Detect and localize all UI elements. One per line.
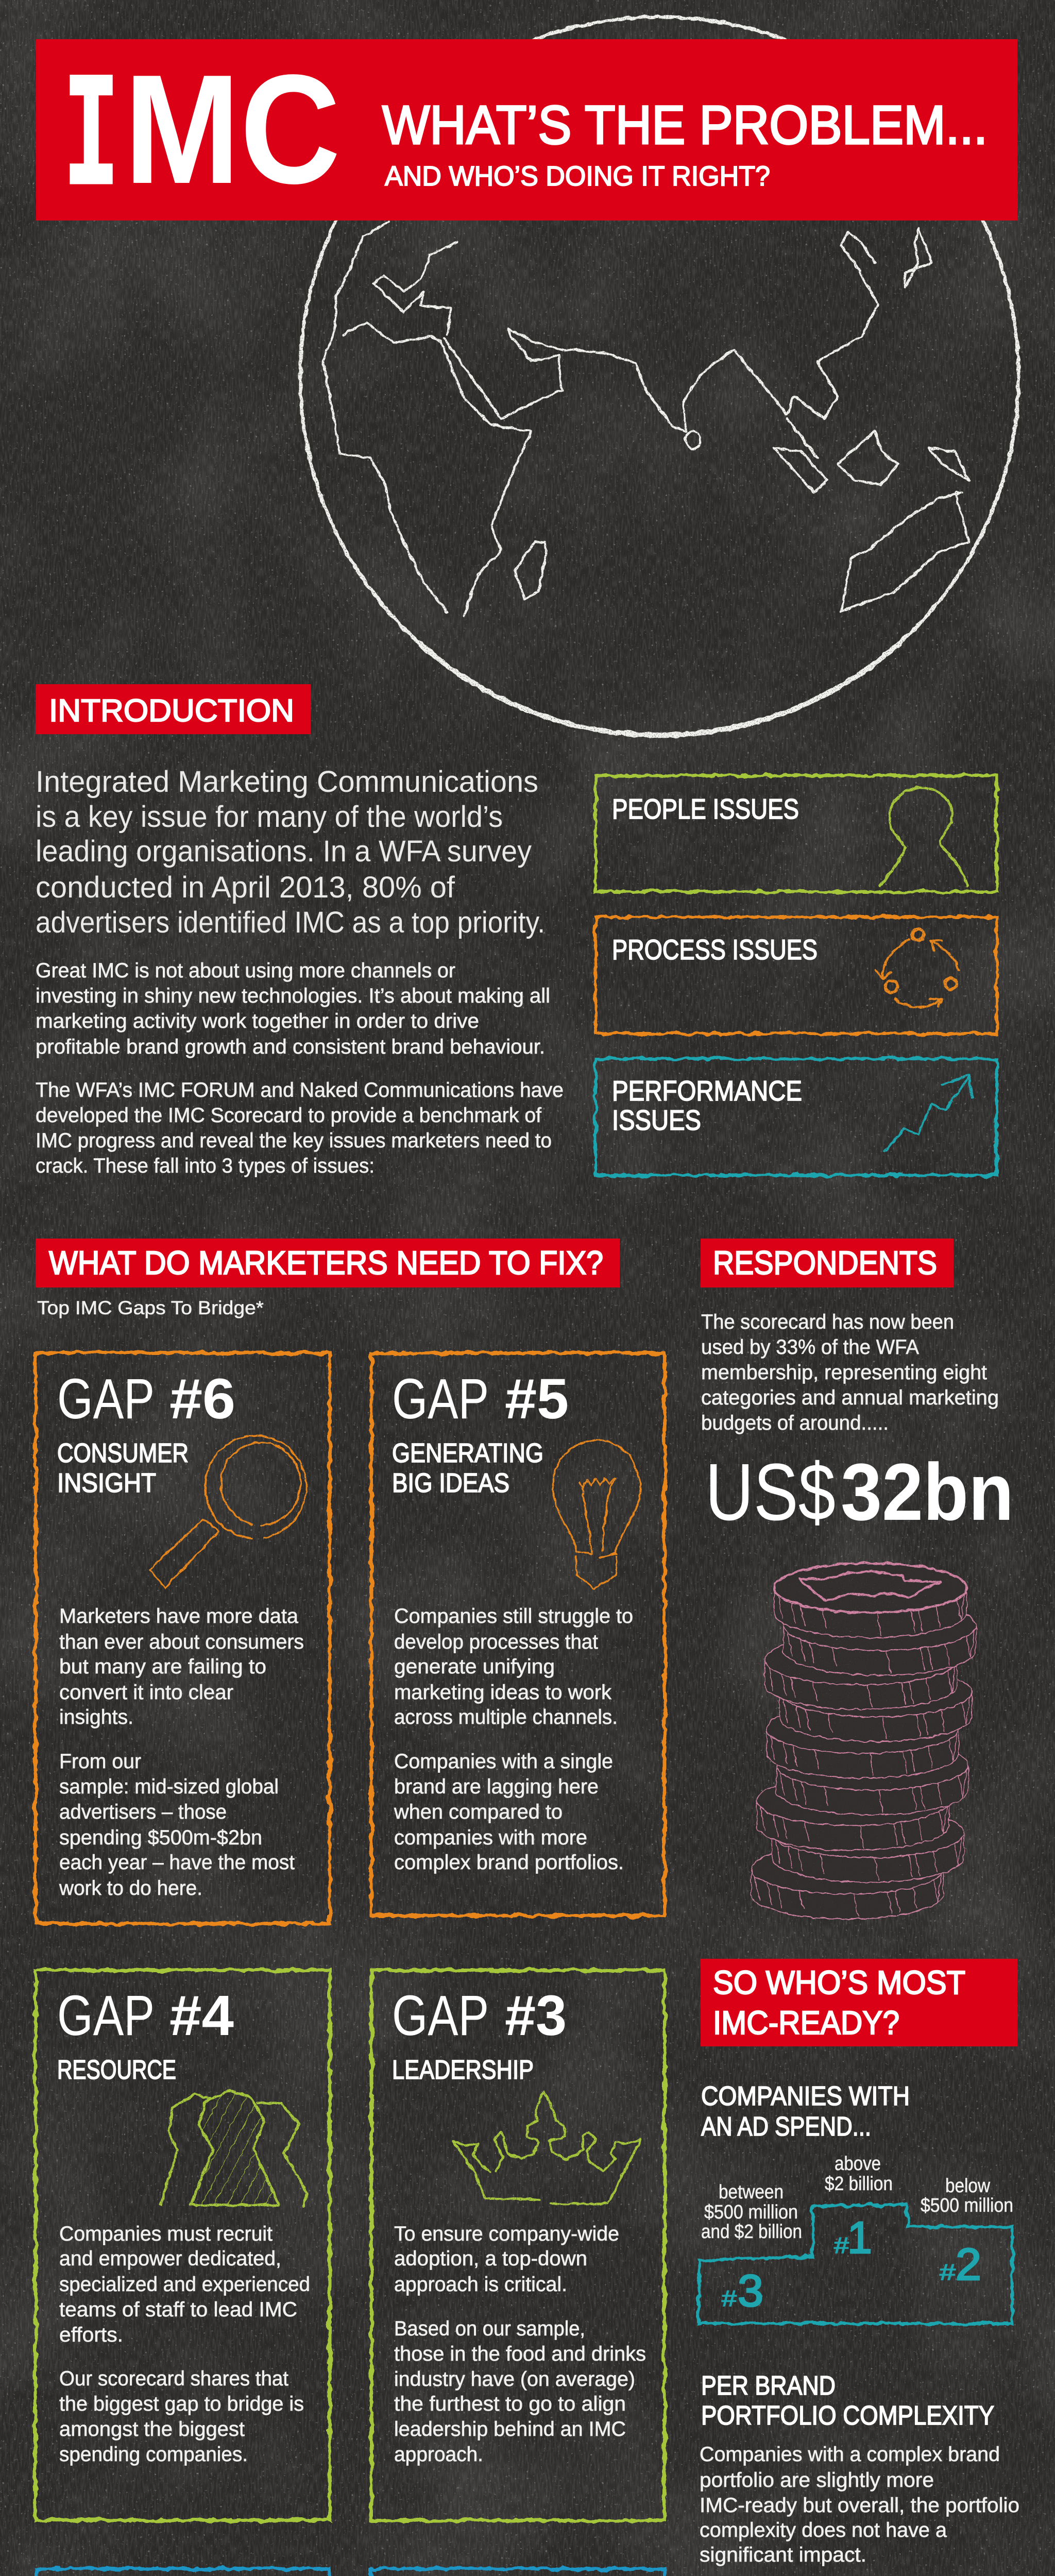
body text: than ever about consumers [59,1631,304,1653]
body text: approach. [394,2443,483,2466]
body text: spending $500m-$2bn [59,1826,262,1849]
text: IMC forum: developed the IMC Scorecard to provide a benchmark of [36,1104,542,1127]
gap title: INSIGHT [57,1468,156,1498]
body text: adoption, a top-down [394,2247,587,2270]
body text: advertisers – those [59,1801,227,1823]
card: gap 2 [36,2569,330,2576]
gap number: #6 [169,1367,235,1431]
stat: US$32bn: 32bn [841,1447,1014,1537]
rank 1: # [834,2233,849,2258]
panel: who's most IMC-ready [699,1959,1029,2576]
rank 1 [834,2213,872,2263]
text: great IMC: marketing activity work together in order to drive [36,1010,479,1032]
gap number [392,1984,567,2047]
body text: and empower dedicated, [59,2247,281,2270]
label: below 500 million: below [945,2175,990,2197]
body text: Companies still struggle to [394,1605,633,1628]
body text: work to do here. [59,1877,202,1900]
icon: light bulb [553,1440,640,1588]
text: scorecard usage: The scorecard has now been [701,1311,954,1333]
body text: brand are lagging here [394,1775,599,1798]
panel: respondents [701,1239,1014,1919]
gap number [57,1367,235,1431]
text: scorecard usage: membership, representing eight [701,1361,987,1384]
body text: From our [59,1750,141,1773]
body text [59,1605,304,1900]
text: lead paragraph: advertisers identified IMC as a top priority. [36,906,545,939]
title: IMC: I [63,48,119,232]
text: lead paragraph: is a key issue for many of the world’s [36,800,503,834]
text: great IMC: Great IMC is not about using more channels or [36,959,455,982]
label: performance issues: ISSUES [612,1104,701,1136]
body text: sample: mid-sized global [59,1775,279,1798]
gap number: GAP [392,1984,489,2047]
heading: so who's most IMC-ready [701,1959,1017,2046]
body text: industry have (on average) [394,2368,635,2391]
panel: process issues [595,917,997,1033]
label: performance issues: PERFORMANCE [612,1075,802,1107]
gap number [392,1367,569,1431]
heading: so who's most IMC-ready: SO WHO’S MOST [713,1964,965,2001]
text: lead paragraph: Integrated Marketing Communications [36,765,538,799]
panel: what do marketers need to fix [36,1239,665,2576]
label: performance issues [612,1075,802,1136]
label: above 2 billion: above [835,2153,881,2175]
body text: insights. [59,1706,133,1728]
text: great IMC: investing in shiny new technologies. It’s about making all [36,985,550,1007]
rank 2: # [940,2260,956,2285]
card: gap 4 [36,1970,330,2520]
text: portfolio complexity: IMC-ready but overall, the portfolio [700,2494,1019,2517]
gap number: #4 [169,1984,234,2047]
text: portfolio complexity: portfolio are slightly more [700,2469,934,2492]
text: IMC forum: IMC progress and reveal the key issues marketers need to [36,1129,552,1152]
text: great IMC: profitable brand growth and consistent brand behaviour. [36,1036,545,1058]
icon: rising chart arrow [884,1075,972,1151]
text: portfolio complexity: Companies with a complex brand [700,2443,1000,2466]
card: gap 3 [371,1970,665,2520]
gap title: CONSUMER [57,1438,189,1468]
label: below 500 million [921,2175,1013,2216]
icon: person [880,788,967,886]
body text [59,2223,310,2466]
body text: companies with more [394,1826,587,1849]
body text: complex brand portfolios. [394,1851,624,1874]
card: gap 5 [371,1353,665,1916]
gap title: RESOURCE [57,2055,176,2085]
text: scorecard usage [701,1311,999,1434]
panel: people issues [595,775,997,892]
text: IMC forum: The WFA’s IMC FORUM and Naked Communications have [36,1079,564,1101]
gap title: GENERATING [392,1438,543,1468]
body text: leadership behind an IMC [394,2418,626,2441]
subheading: ad spend [701,2081,910,2142]
body text: efforts. [59,2324,123,2346]
title banner [36,39,1017,232]
label: above 2 billion: $2 billion [825,2173,893,2195]
panel: performance issues [595,1059,997,1175]
gap number: #5 [505,1367,569,1431]
body text: amongst the biggest [59,2418,245,2441]
body text: teams of staff to lead IMC [59,2298,297,2321]
icon: crown [453,2092,641,2204]
body text: convert it into clear [59,1681,233,1704]
stat: US$32bn [705,1447,1014,1537]
subheading: per brand portfolio complexity: PORTFOLIO COMPLEXITY [701,2401,994,2431]
label: below 500 million: $500 million [921,2195,1013,2216]
text: portfolio complexity: complexity does not have a [700,2519,947,2541]
subheading: ad spend: COMPANIES WITH [701,2081,910,2111]
rank 2: 2 [956,2240,981,2290]
gap title [392,1438,543,1498]
gap number [57,1984,234,2047]
body text: the furthest to go to align [394,2393,626,2415]
text: lead paragraph: leading organisations. In a WFA survey [36,835,532,868]
icon: magnifying glass [149,1435,306,1588]
body text: marketing ideas to work [394,1681,612,1704]
heading: what do marketers need to fix: WHAT DO MARKETERS NEED TO FIX? [49,1244,603,1281]
body text: across multiple channels. [394,1706,618,1728]
icon: chalk globe [300,17,1018,735]
icon: process cycle [876,929,959,1007]
body text: Companies must recruit [59,2223,273,2245]
subheading: ad spend: AN AD SPEND... [701,2112,871,2142]
heading: respondents [701,1239,954,1287]
title: IMC [63,42,341,232]
body text [394,2223,646,2466]
body text: develop processes that [394,1631,598,1653]
heading: respondents: RESPONDENTS [713,1244,937,1281]
text: lead paragraph: conducted in April 2013, 80% of [36,871,455,904]
body text: Based on our sample, [394,2317,585,2340]
label: between 500 million and 2 billion [701,2181,802,2243]
body text: those in the food and drinks [394,2343,646,2365]
text: scorecard usage: used by 33% of the WFA [701,1336,919,1359]
body text: spending companies. [59,2443,248,2466]
gap title: LEADERSHIP [392,2055,534,2085]
card: gap 1 [371,2569,665,2576]
body text: Marketers have more data [59,1605,299,1628]
text: IMC forum [36,1079,564,1177]
gap number: GAP [57,1367,155,1431]
heading: introduction [36,684,311,734]
body text: specialized and experienced [59,2273,310,2296]
heading: so who's most IMC-ready: IMC-READY? [713,2004,899,2041]
rank 3: # [722,2286,737,2311]
gap number: GAP [57,1984,155,2047]
label: between 500 million and 2 billion: and $2 billion [701,2221,802,2243]
card: gap 6 [36,1353,330,1924]
body text: approach is critical. [394,2273,567,2296]
body text: but many are failing to [59,1655,266,1678]
rank 1: 1 [847,2213,872,2263]
rank 3: 3 [738,2266,763,2316]
body text: generate unifying [394,1655,555,1678]
subheading: per brand portfolio complexity [701,2371,994,2431]
podium chart: ad spend [699,2153,1013,2324]
rank 3 [722,2266,763,2316]
body text: when compared to [394,1801,563,1823]
label: above 2 billion [825,2153,893,2195]
body text: Companies with a single [394,1750,613,1773]
gap number: #3 [505,1984,567,2047]
body text: the biggest gap to bridge is [59,2393,304,2415]
gap number: GAP [392,1367,489,1431]
subheading: per brand portfolio complexity: PER BRAND [701,2371,836,2401]
gap title [57,1438,189,1498]
icon: stack of coins [751,1563,976,1919]
text: top IMC gaps: Top IMC Gaps To Bridge* [37,1297,264,1318]
text: great IMC [36,959,550,1058]
stat: US$32bn: US$ [705,1447,836,1537]
label: process issues: PROCESS ISSUES [612,934,818,965]
label: between 500 million and 2 billion: between [719,2181,784,2203]
subtitle: AND WHO’S DOING IT RIGHT? [385,161,770,192]
icon: group of people [161,2090,307,2206]
label: people issues: PEOPLE ISSUES [612,793,799,825]
label: between 500 million and 2 billion: $500 million [704,2201,798,2223]
body text: Our scorecard shares that [59,2367,288,2390]
title: what's the problem: WHAT’S THE PROBLEM... [382,95,988,156]
title: IMC: MC [124,42,341,216]
text: scorecard usage: categories and annual marketing [701,1386,999,1409]
heading: introduction: INTRODUCTION [49,693,294,728]
body text [394,1605,633,1874]
gap title: BIG IDEAS [392,1468,509,1498]
text: IMC forum: crack. These fall into 3 types of issues: [36,1155,375,1177]
text: lead paragraph [36,765,545,939]
rank 2 [940,2240,981,2290]
panel: introduction [36,684,997,1177]
text: portfolio complexity [700,2443,1019,2566]
text: scorecard usage: budgets of around..... [701,1412,889,1434]
body text: To ensure company-wide [394,2223,619,2245]
body text: each year – have the most [59,1851,295,1874]
text: portfolio complexity: significant impact. [700,2544,866,2566]
